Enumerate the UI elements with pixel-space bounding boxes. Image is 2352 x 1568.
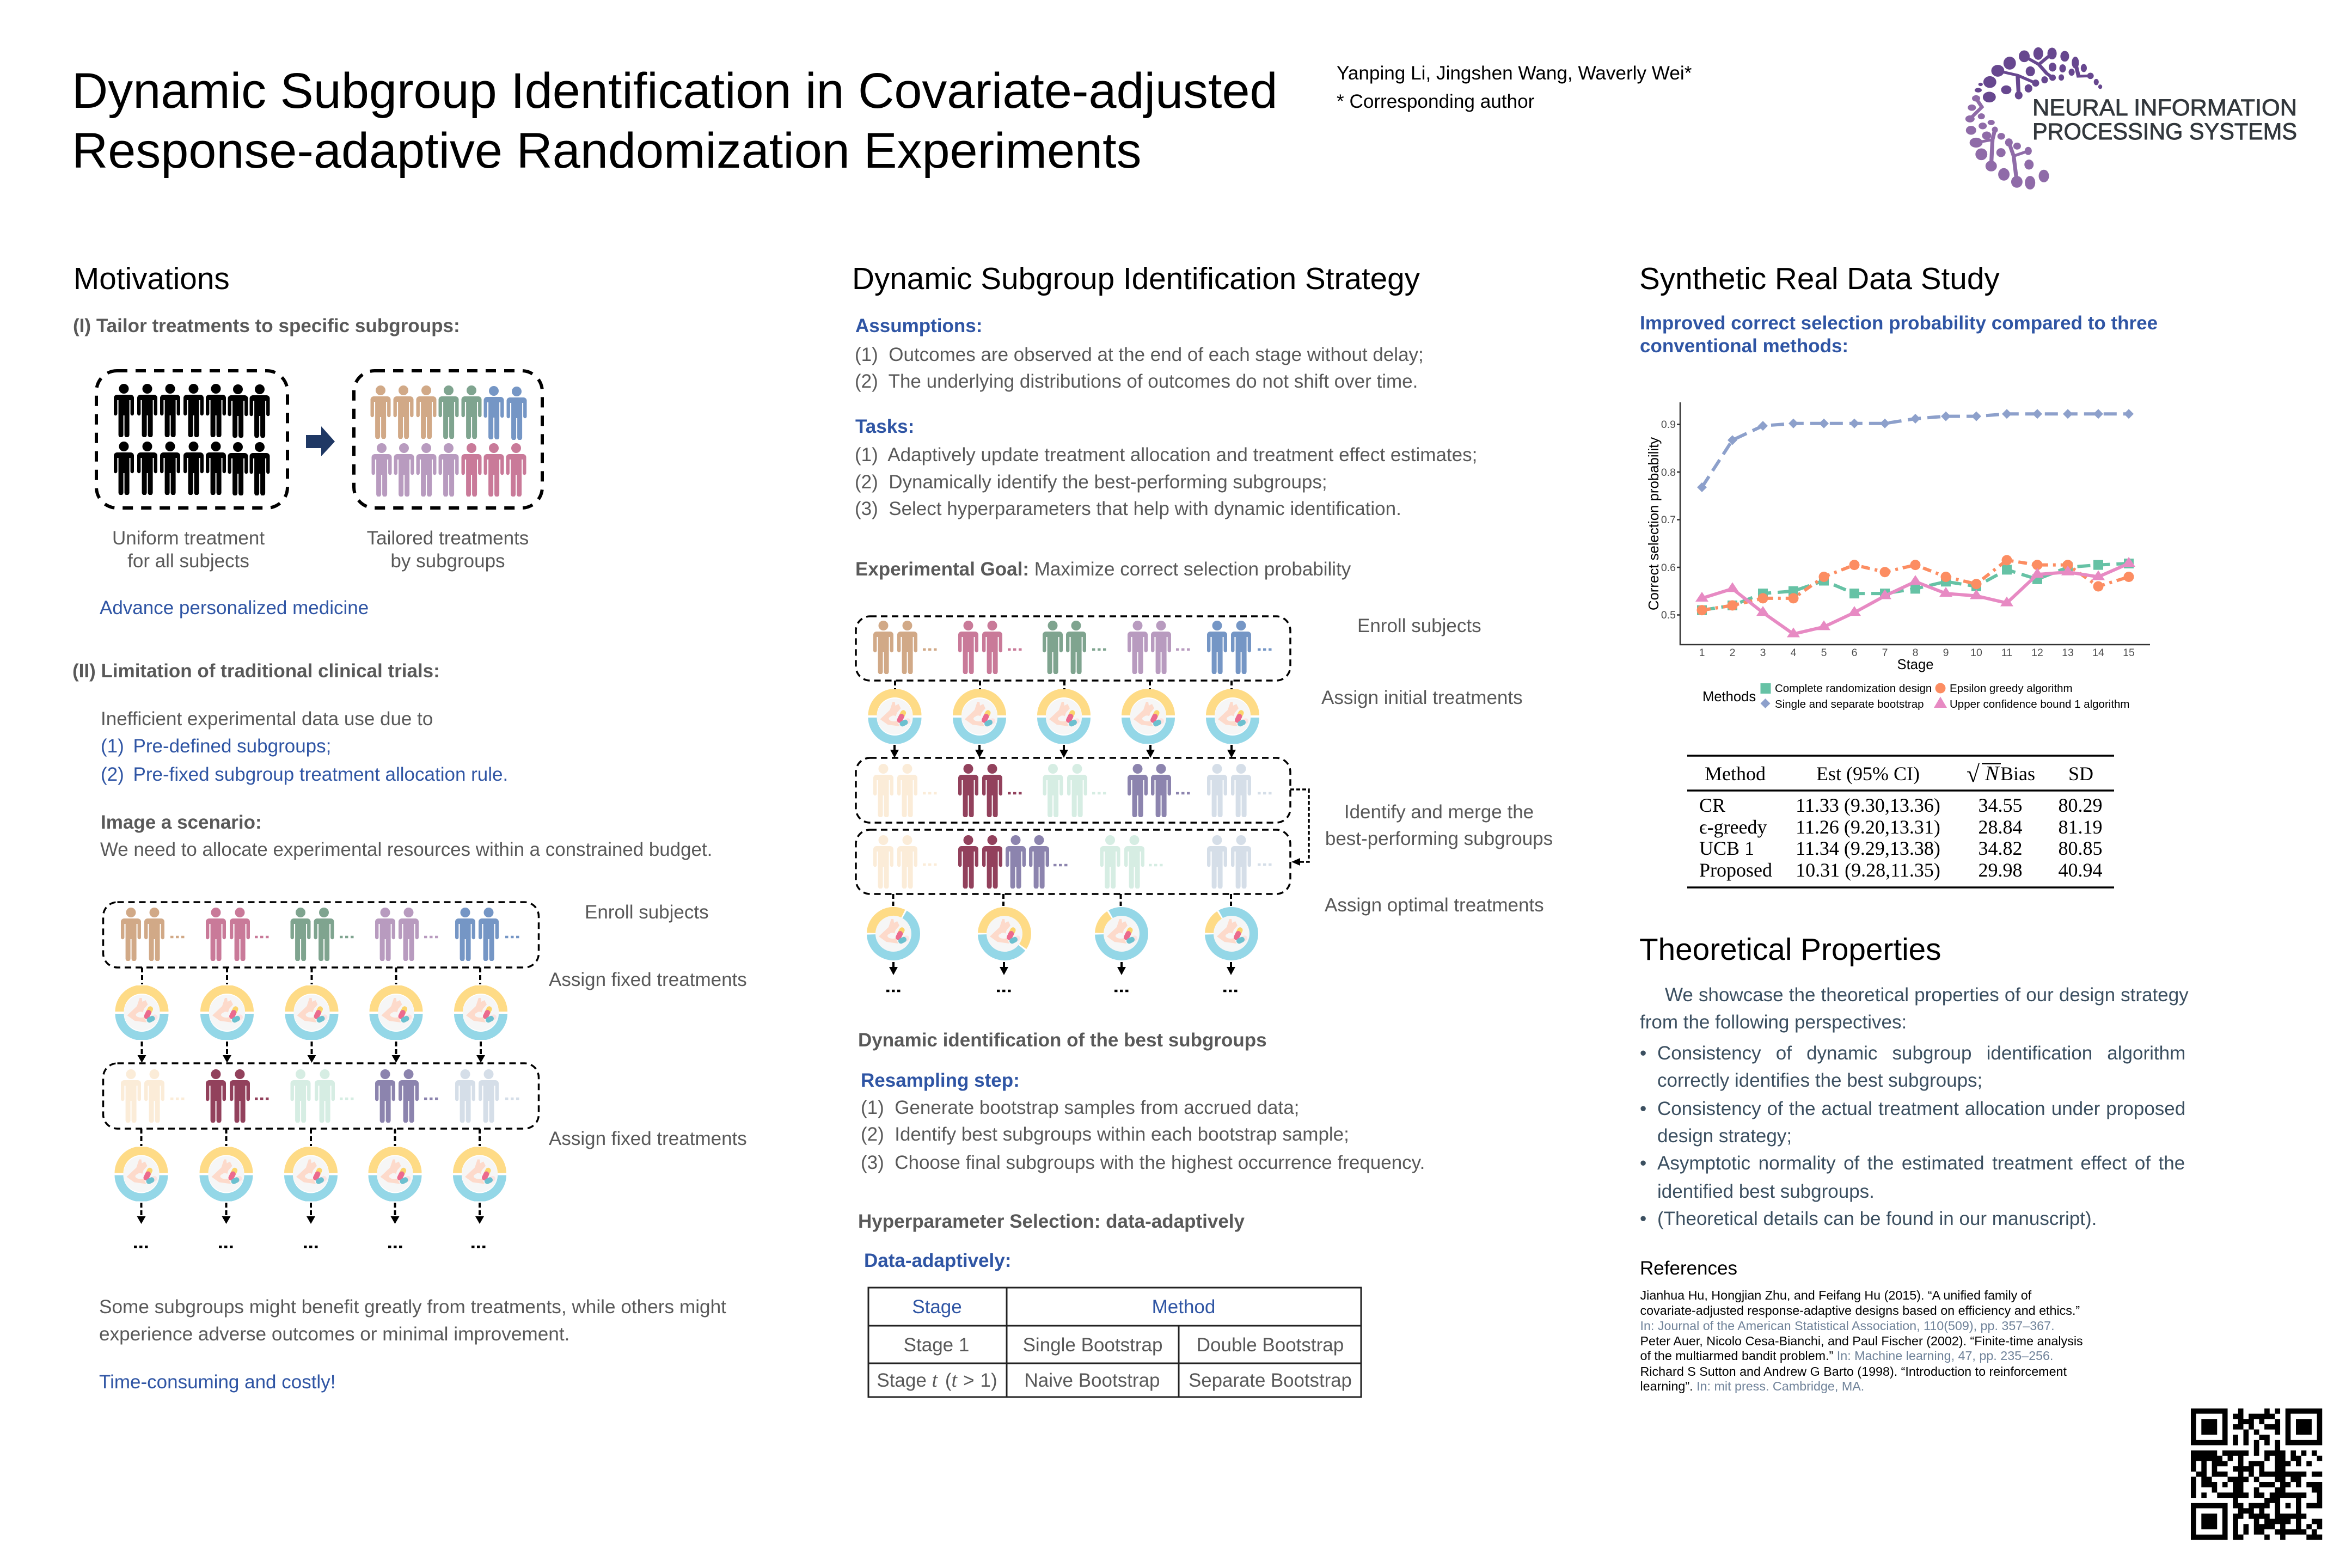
x tick labels [1699,647,2135,659]
table: estimation results: 34.55 [1979,794,2022,816]
text block: improved selection: Improved correct selection probability compared to three [1640,313,2158,334]
bullet list: properties: Consistency of dynamic subgroup identification algorithm [1657,1043,2185,1064]
text block: subgroup outcomes: experience adverse outcomes or minimal improvement. [99,1324,569,1345]
y tick labels: 0.8 [1661,467,1676,479]
bullet list: properties: Asymptotic normality of the estimated treatment effect of the [1657,1153,2185,1174]
legend: Methods [1702,689,1756,705]
x tick labels: 13 [2062,647,2074,659]
table: estimation results [1687,756,2114,887]
y tick labels: 0.5 [1661,609,1676,621]
subheading: tailor treatments: (I) Tailor treatments to specific subgroups: [73,315,460,336]
treatment icons: optimal [871,894,1254,991]
subheading: limitation: (II) Limitation of traditional clinical trials: [72,660,440,682]
text block: reference list: In: Journal of the American Statistical Association, 110(509), pp. 357–367. [1640,1319,2055,1333]
table: estimation results: 11.33 (9.30,13.36) [1796,794,1940,816]
merge connector arrow [1290,789,1309,866]
table: stage and method: Stage [912,1296,962,1318]
diagram: uniform to tailored treatment [96,371,542,572]
legend: Upper confidence bound 1 algorithm [1950,698,2130,710]
x tick labels: 10 [1970,647,1982,659]
label: assign fixed treatments 2: Assign fixed treatments [549,1128,747,1149]
bullet list: properties [1640,1043,2185,1229]
subheading: data-adaptively: Data-adaptively: [864,1250,1011,1271]
estimated subjects row [856,758,1290,823]
table: estimation results: 11.34 (9.29,13.38) [1796,837,1940,859]
text block: scenario [100,812,712,860]
line chart: correct selection probability [1646,402,2150,710]
axes [1677,402,2150,645]
label: identify and merge: Identify and merge the [1344,801,1534,823]
label: enroll subjects: Enroll subjects [1357,615,1481,636]
text block: tasks: (3) Select hyperparameters that help with dynamic identification. [855,498,1401,519]
arrow [306,426,335,456]
x tick labels: 4 [1791,647,1797,659]
callout: personalized medicine: Advance personalized medicine [100,597,369,618]
table: estimation results: Proposed [1699,859,1772,881]
table: estimation results: 81.19 [2058,816,2103,838]
table: estimation results: √ [1967,761,1980,787]
text block: inefficiency: Inefficient experimental data use due to [101,708,433,730]
table: stage and method: Double Bootstrap [1197,1334,1344,1356]
label: identify and merge: best-performing subgroups [1325,828,1553,849]
x tick labels: 3 [1760,647,1766,659]
y tick labels: 0.9 [1661,419,1676,431]
legend: Single and separate bootstrap [1775,698,1924,710]
table: estimation results: 28.84 [1979,816,2022,838]
bullet list: properties: • [1640,1208,1646,1229]
bullet list: properties: (Theoretical details can be found in our manuscript). [1657,1208,2097,1229]
callout: time-consuming: Time-consuming and costly! [99,1371,335,1393]
table: stage and method [868,1288,1361,1397]
bullet list: properties: identified best subgroups. [1657,1181,1875,1202]
panel: theoretical properties [1639,933,2189,1393]
text block: reference list: learning”. In: mit press. Cambridge, MA. [1640,1379,1864,1393]
x tick labels: 8 [1913,647,1918,659]
x tick labels: 9 [1943,647,1949,659]
heading: motivations: Motivations [74,262,230,296]
text block: assumptions: (1) Outcomes are observed at the end of each stage without delay; [855,344,1424,365]
label: enroll subjects: Enroll subjects [585,902,709,923]
text block: tasks: (2) Dynamically identify the best-performing subgroups; [855,471,1327,493]
table: stage and method: Single Bootstrap [1023,1334,1162,1356]
logo: Neural Information Processing Systems: PROCESSING SYSTEMS [2032,119,2297,145]
diagram: dynamic identification flow [856,615,1553,991]
heading: theoretical properties: Theoretical Properties [1639,933,1941,967]
text block: subgroup outcomes: Some subgroups might benefit greatly from treatments, while others might [99,1296,726,1318]
caption: uniform: Uniform treatment [112,528,265,549]
table: stage and method: Naive Bootstrap [1024,1370,1160,1391]
treatment icons row 2 [114,1129,506,1247]
text block: reference list: Richard S Sutton and Andrew G Barto (1998). “Introduction to reinforcement [1640,1364,2067,1379]
text block: resampling step: (3) Choose final subgroups with the highest occurrence frequency. [861,1152,1425,1173]
y tick labels: 0.6 [1661,562,1676,574]
table: estimation results: UCB 1 [1699,837,1754,859]
x tick labels: 7 [1882,647,1888,659]
authors: * Corresponding author [1337,91,1535,112]
panel: motivations [72,262,747,1393]
text block: reference list: covariate-adjusted response-adaptive designs based on efficiency and ethics.” [1640,1303,2080,1318]
text block: subgroup outcomes [99,1296,726,1345]
x tick labels: 15 [2123,647,2135,659]
logo: Neural Information Processing Systems [1966,48,2297,189]
authors: Yanping Li, Jingshen Wang, Waverly Wei* [1337,63,1692,84]
text block: resampling step: (1) Generate bootstrap samples from accrued data; [861,1097,1299,1118]
label: assign fixed treatments 1: Assign fixed treatments [549,969,747,990]
panel: dynamic subgroup identification strategy [852,262,1553,1397]
title: Response-adaptive Randomization Experiments [72,123,1141,179]
table: estimation results: CR [1699,794,1725,816]
text block: resampling step: Resampling step: [861,1070,1020,1091]
text block: tasks: Tasks: [855,416,914,437]
text block: assumptions: (2) The underlying distributions of outcomes do not shift over time. [855,371,1418,392]
table: estimation results: SD [2068,763,2093,785]
text block: improved selection: conventional methods: [1640,335,1848,357]
table: estimation results: Bias [2000,763,2035,785]
axis title: correct selection probability: Correct selection probability [1646,437,1662,610]
caption: uniform second line: for all subjects [127,550,249,572]
treatment icons row 1 [115,967,507,1063]
x tick labels: 11 [2001,647,2012,659]
heading: references: References [1640,1258,1737,1279]
text block: inefficiency: (2) Pre-fixed subgroup treatment allocation rule. [101,764,508,785]
authors [1337,63,1692,112]
logo: Neural Information Processing Systems: NEURAL INFORMATION [2032,95,2297,121]
text block: tasks [855,416,1477,519]
QR code [2191,1408,2322,1540]
y tick labels: 0.7 [1661,514,1676,526]
table: estimation results: ϵ-greedy [1699,816,1767,838]
table: estimation results: 11.26 (9.20,13.31) [1796,816,1940,838]
x tick labels: 1 [1699,647,1705,659]
text block: assumptions [855,315,1424,392]
heading: strategy: Dynamic Subgroup Identification Strategy [852,262,1420,296]
text block: inefficiency [101,708,508,785]
uniform treatment group [96,371,287,508]
table: stage and method: Stage 1 [904,1334,969,1356]
legend [1702,682,2130,710]
enrolled subjects row [856,616,1290,681]
bullet list: properties: Consistency of the actual treatment allocation under proposed [1657,1098,2185,1119]
x tick labels: 12 [2031,647,2043,659]
table: estimation results: Est (95% CI) [1816,763,1920,785]
text block: intro [1640,984,2189,1033]
axis title: stage: Stage [1897,657,1933,672]
merged subjects row [856,830,1290,894]
series: single and separate bootstrap [1697,409,2134,492]
tailored treatment group [354,371,542,508]
x tick labels: 6 [1852,647,1857,659]
text block: assumptions: Assumptions: [855,315,982,336]
legend: Complete randomization design [1775,682,1932,695]
series: upper confidence bound [1695,557,2135,637]
table: estimation results: Method [1705,763,1766,785]
label: assign initial treatments: Assign initial treatments [1321,687,1523,708]
text block: reference list: of the multiarmed bandit problem.” In: Machine learning, 47, pp. 235–256. [1640,1349,2053,1363]
x tick labels: 14 [2092,647,2104,659]
text block: tasks: (1) Adaptively update treatment allocation and treatment effect estimates; [855,444,1477,465]
bullet list: properties: • [1640,1153,1646,1174]
subheading: dynamic identification: Dynamic identification of the best subgroups [858,1030,1267,1051]
enrolled subjects row [103,902,539,967]
text block: scenario: We need to allocate experimental resources within a constrained budget. [100,839,712,860]
text block: intro: from the following perspectives: [1640,1012,1907,1033]
heading: synthetic real data study: Synthetic Real Data Study [1639,262,2000,296]
legend: Epsilon greedy algorithm [1950,682,2073,695]
series: complete randomization [1697,564,2134,610]
diagram: fixed treatments flow [103,902,747,1247]
x tick labels: 2 [1730,647,1735,659]
text block: scenario: Image a scenario: [101,812,262,833]
text block: intro: We showcase the theoretical properties of our design strategy [1665,984,2189,1006]
label: assign optimal treatments: Assign optimal treatments [1325,895,1544,916]
table: stage and method: Stage t (t > 1) [877,1369,997,1392]
table: stage and method: Method [1152,1296,1215,1318]
table: estimation results: 80.85 [2058,837,2103,859]
text block: reference list: Jianhua Hu, Hongjian Zhu, and Feifang Hu (2015). “A unified family of [1640,1288,2032,1302]
table: estimation results: N [1984,762,2000,785]
bullet list: properties: design strategy; [1657,1125,1792,1147]
subheading: hyperparameter selection: Hyperparameter Selection: data-adaptively [858,1211,1245,1232]
caption: tailored second line: by subgroups [390,550,505,572]
caption: tailored: Tailored treatments [367,528,529,549]
title [72,63,1278,179]
text block: resampling step [861,1070,1425,1173]
table: estimation results: 29.98 [1979,859,2022,881]
text block: reference list: Peter Auer, Nicolo Cesa-Bianchi, and Paul Fischer (2002). “Finite-time analysis [1640,1334,2083,1348]
text block: reference list [1640,1288,2083,1393]
table: estimation results: 34.82 [1979,837,2022,859]
text block: improved selection [1640,313,2158,357]
bullet list: properties: correctly identifies the best subgroups; [1657,1070,1982,1091]
text: experimental goal: Experimental Goal: Maximize correct selection probability [855,559,1351,580]
table: estimation results: 80.29 [2058,794,2103,816]
table: estimation results: 10.31 (9.28,11.35) [1796,859,1940,881]
bullet list: properties: • [1640,1043,1646,1064]
text block: resampling step: (2) Identify best subgroups within each bootstrap sample; [861,1124,1349,1145]
table: stage and method: Separate Bootstrap [1189,1370,1352,1391]
series: epsilon greedy [1702,560,2129,610]
title: Dynamic Subgroup Identification in Covariate-adjusted [72,63,1278,119]
table: estimation results: 40.94 [2058,859,2103,881]
panel: synthetic real data study [1639,262,2158,887]
label: identify and merge [1325,801,1553,849]
updated subjects row [103,1063,539,1129]
x tick labels: 5 [1821,647,1827,659]
y tick labels [1661,419,1676,621]
treatment icons: initial [868,681,1259,758]
bullet list: properties: • [1640,1098,1646,1119]
text block: inefficiency: (1) Pre-defined subgroups; [101,736,331,757]
